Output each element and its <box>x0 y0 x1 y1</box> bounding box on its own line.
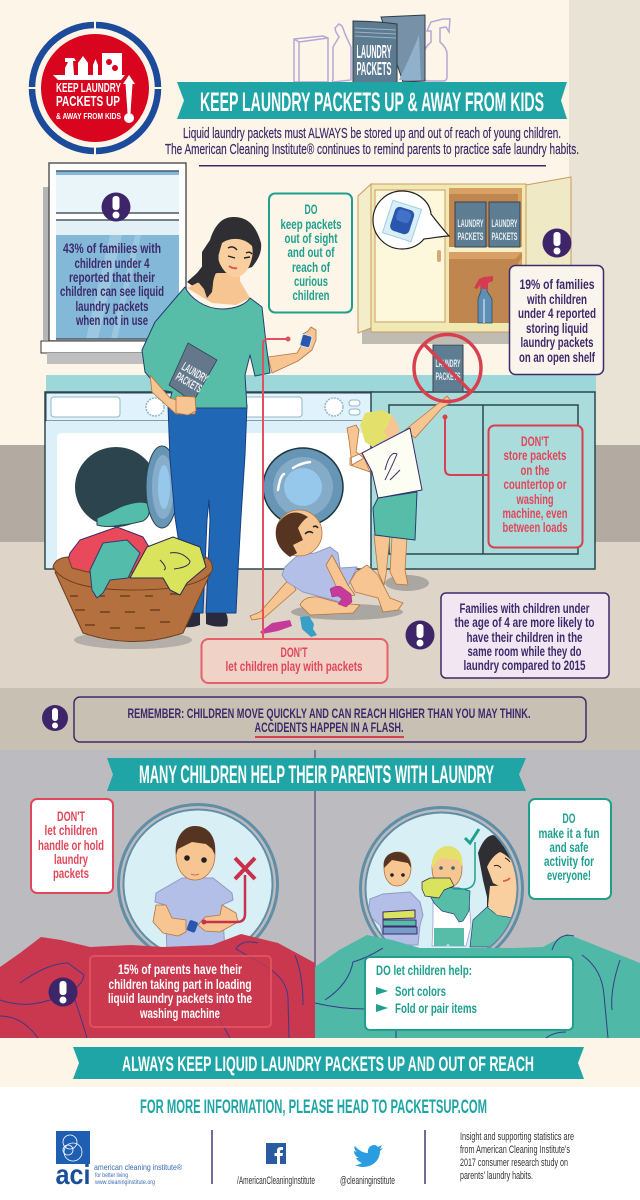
source note: from American Cleaning Institute's <box>460 1144 570 1156</box>
baby on floor <box>250 510 403 620</box>
logo badge: keep laundry packets up: PACKETS UP <box>56 93 120 110</box>
product illustration above banner: PACKETS <box>356 59 392 79</box>
callout: open shelf statistic: laundry packets <box>520 334 594 350</box>
callout: parents loading statistic: children taking part in loading <box>108 976 252 992</box>
callout: do let children help list: Fold or pair items <box>395 1000 477 1016</box>
woman: hair back <box>187 217 261 299</box>
window statistic text: children can see liquid <box>60 283 164 299</box>
callout: do not store on counter: countertop or <box>504 476 567 492</box>
footer dividers <box>212 1130 425 1184</box>
arrow: counter connector <box>444 416 488 475</box>
callout: open shelf statistic <box>510 266 604 374</box>
lower cabinets <box>371 392 595 569</box>
callout: do not store on counter: DON'T <box>521 433 549 449</box>
window statistic text: children under 4 <box>74 255 150 271</box>
family: children and mother clipped to porthole <box>368 835 525 947</box>
callout: do make it fun: DO <box>562 810 576 826</box>
callout: do not let children handle: packets <box>53 865 89 881</box>
woman: hair strands over shoulder <box>193 240 219 298</box>
callout icon: parents loading statistic <box>48 978 78 1006</box>
callout: do not store on counter: washing <box>516 491 554 507</box>
arrow: do connector to hand <box>263 338 290 638</box>
callout: do not store on counter: machine, even <box>502 505 568 521</box>
woman: small packet in hand <box>300 334 312 348</box>
window statistic text: 43% of families with <box>63 240 161 256</box>
callout: do make it fun: activity for <box>544 853 594 869</box>
callout: do not store on counter: store packets <box>504 447 567 463</box>
banner: many children help <box>107 758 526 791</box>
prohibited packet symbol <box>414 334 481 402</box>
packets on shelf: PACKETS <box>458 231 484 243</box>
banner: main title <box>177 82 567 119</box>
callout: same room statistic: have their children in the <box>466 629 583 645</box>
callout icon: cabinet statistic <box>542 228 572 258</box>
callout: do not let children play: DON'T <box>280 644 308 660</box>
callout: do make it fun: and safe <box>550 839 589 855</box>
packets on shelf <box>455 202 520 247</box>
logo badge: keep laundry packets up <box>28 20 162 156</box>
packets on shelf: LAUNDRY <box>492 218 518 230</box>
toddler reaching for packet <box>347 396 452 591</box>
spray bottle on shelf <box>474 276 493 323</box>
callout: do make it fun: make it a fun <box>538 825 600 841</box>
logo: american cleaning institute: aci <box>56 1159 90 1190</box>
woman: jeans <box>168 405 247 613</box>
window statistic text: when not in use <box>75 312 148 328</box>
twitter icon and handle <box>340 1145 395 1187</box>
intro text <box>165 125 579 166</box>
window statistic text <box>60 240 164 328</box>
laundry basket with clothes <box>53 527 212 649</box>
callout: do not let children handle: laundry <box>54 851 88 867</box>
toy letter blocks <box>260 616 317 637</box>
callout: do keep packets out of sight: DO <box>304 201 318 217</box>
callout: parents loading statistic: washing machine <box>139 1005 220 1021</box>
callout: open shelf statistic: on an open shelf <box>519 349 595 365</box>
logo: american cleaning institute: american cleaning institute® <box>94 1163 182 1172</box>
teal cloth pile <box>315 934 640 1038</box>
source note <box>460 1131 574 1182</box>
window statistic text: reported that their <box>69 269 155 285</box>
woman: held packet: LAUNDRY <box>179 359 211 386</box>
product illustration above banner <box>294 15 450 87</box>
callout: same room statistic: laundry compared to 2015 <box>464 657 586 673</box>
callout: do not let children play <box>202 639 388 683</box>
callout: do make it fun <box>529 799 611 899</box>
callout icon: window statistic <box>102 192 130 222</box>
speech bubble with packet <box>373 191 449 249</box>
packets on shelf: PACKETS <box>492 231 518 243</box>
woman: neck and chest <box>187 273 250 305</box>
green check with connector <box>453 829 479 889</box>
callout: do keep packets out of sight: reach of <box>292 259 330 275</box>
remember message <box>74 697 586 742</box>
callout: do not let children handle: handle or hold <box>38 837 104 853</box>
logo: american cleaning institute: for better living <box>95 1173 128 1179</box>
logo: american cleaning institute <box>56 1131 182 1190</box>
callout: do keep packets out of sight <box>269 194 352 312</box>
logo: american cleaning institute: www.cleaninginstitute.org <box>94 1180 155 1186</box>
callout: do make it fun: everyone! <box>547 867 591 883</box>
callout: open shelf statistic: with children <box>526 291 587 307</box>
callout: open shelf statistic: under 4 reported <box>518 305 596 321</box>
woman holding packets <box>142 217 316 627</box>
counter and washing machines <box>45 375 596 569</box>
packets on shelf: LAUNDRY <box>458 218 484 230</box>
source note: 2017 consumer research study on <box>460 1157 568 1169</box>
woman: near forearm <box>150 375 196 414</box>
callout: do not let children play: let children play with packets <box>226 658 363 674</box>
woman: hand on packet <box>176 396 196 415</box>
callout: open shelf statistic: 19% of families <box>520 276 595 292</box>
facebook icon and handle <box>237 1143 315 1187</box>
callout: open shelf statistic: storing liquid <box>526 320 588 336</box>
callout: parents loading statistic <box>90 956 271 1027</box>
red cloth pile <box>0 934 315 1038</box>
woman: teal top <box>142 287 270 408</box>
callout: same room statistic: same room while they do <box>468 643 582 659</box>
facebook icon and handle: /AmericanCleaningInstitute <box>237 1175 315 1187</box>
callout: do let children help list: DO let children help: <box>376 962 472 978</box>
callout: do keep packets out of sight: children <box>292 287 330 303</box>
woman: face <box>218 239 253 277</box>
callout: do not let children handle: let children <box>44 822 98 838</box>
callout: do keep packets out of sight: out of sight <box>284 230 338 246</box>
woman: outstretched forearm <box>268 327 316 373</box>
product illustration above banner: LAUNDRY <box>356 42 392 62</box>
source note: Insight and supporting statistics are <box>460 1131 574 1143</box>
logo badge: keep laundry packets up: & AWAY FROM KIDS <box>56 111 121 121</box>
remember message: ACCIDENTS HAPPEN IN A FLASH. <box>254 719 404 735</box>
porthole: family sorting laundry <box>359 806 524 948</box>
window statistic text: laundry packets <box>76 298 149 314</box>
callout: do not store on counter: between loads <box>502 519 568 535</box>
section divider <box>314 750 316 1038</box>
woman: shoes <box>183 613 228 627</box>
callout: do let children help list <box>365 957 573 1030</box>
red x with connector <box>202 858 255 924</box>
callout: do keep packets out of sight: keep packets <box>280 216 342 232</box>
callout: do keep packets out of sight: curious <box>294 273 328 289</box>
callout icon: same room statistic <box>406 620 434 650</box>
washer two: door <box>263 448 343 526</box>
callout: same room statistic <box>441 593 609 678</box>
callout: do not store on counter: on the <box>520 462 550 478</box>
callout: do not let children handle: DON'T <box>57 808 85 824</box>
wall cabinet <box>358 177 572 344</box>
callout: parents loading statistic: 15% of parents have their <box>118 961 242 977</box>
callout: do keep packets out of sight: and out of <box>288 244 335 260</box>
porthole: child holding packet <box>118 804 278 964</box>
callout: do not let children handle <box>31 799 113 893</box>
callout: do not store on counter <box>488 426 582 548</box>
prohibited packet symbol: LAUNDRY <box>436 358 461 370</box>
logo badge: keep laundry packets up: KEEP LAUNDRY <box>56 80 121 95</box>
woman: eyes and lips <box>228 247 252 258</box>
window <box>41 163 191 364</box>
callout: do let children help list: Sort colors <box>395 983 446 999</box>
prohibited packet symbol: PACKETS <box>436 371 460 383</box>
woman: held packet: PACKETS <box>173 369 205 396</box>
twitter icon and handle: @cleaninginstitute <box>340 1175 395 1187</box>
woman: held packet <box>169 343 217 402</box>
banner: always keep packets up <box>73 1047 584 1079</box>
washer one: open drum with clothes <box>75 446 178 528</box>
callout: parents loading statistic: liquid laundry packets into the <box>108 990 252 1006</box>
callout icon: remember <box>42 705 68 731</box>
source note: parents' laundry habits. <box>460 1170 533 1182</box>
